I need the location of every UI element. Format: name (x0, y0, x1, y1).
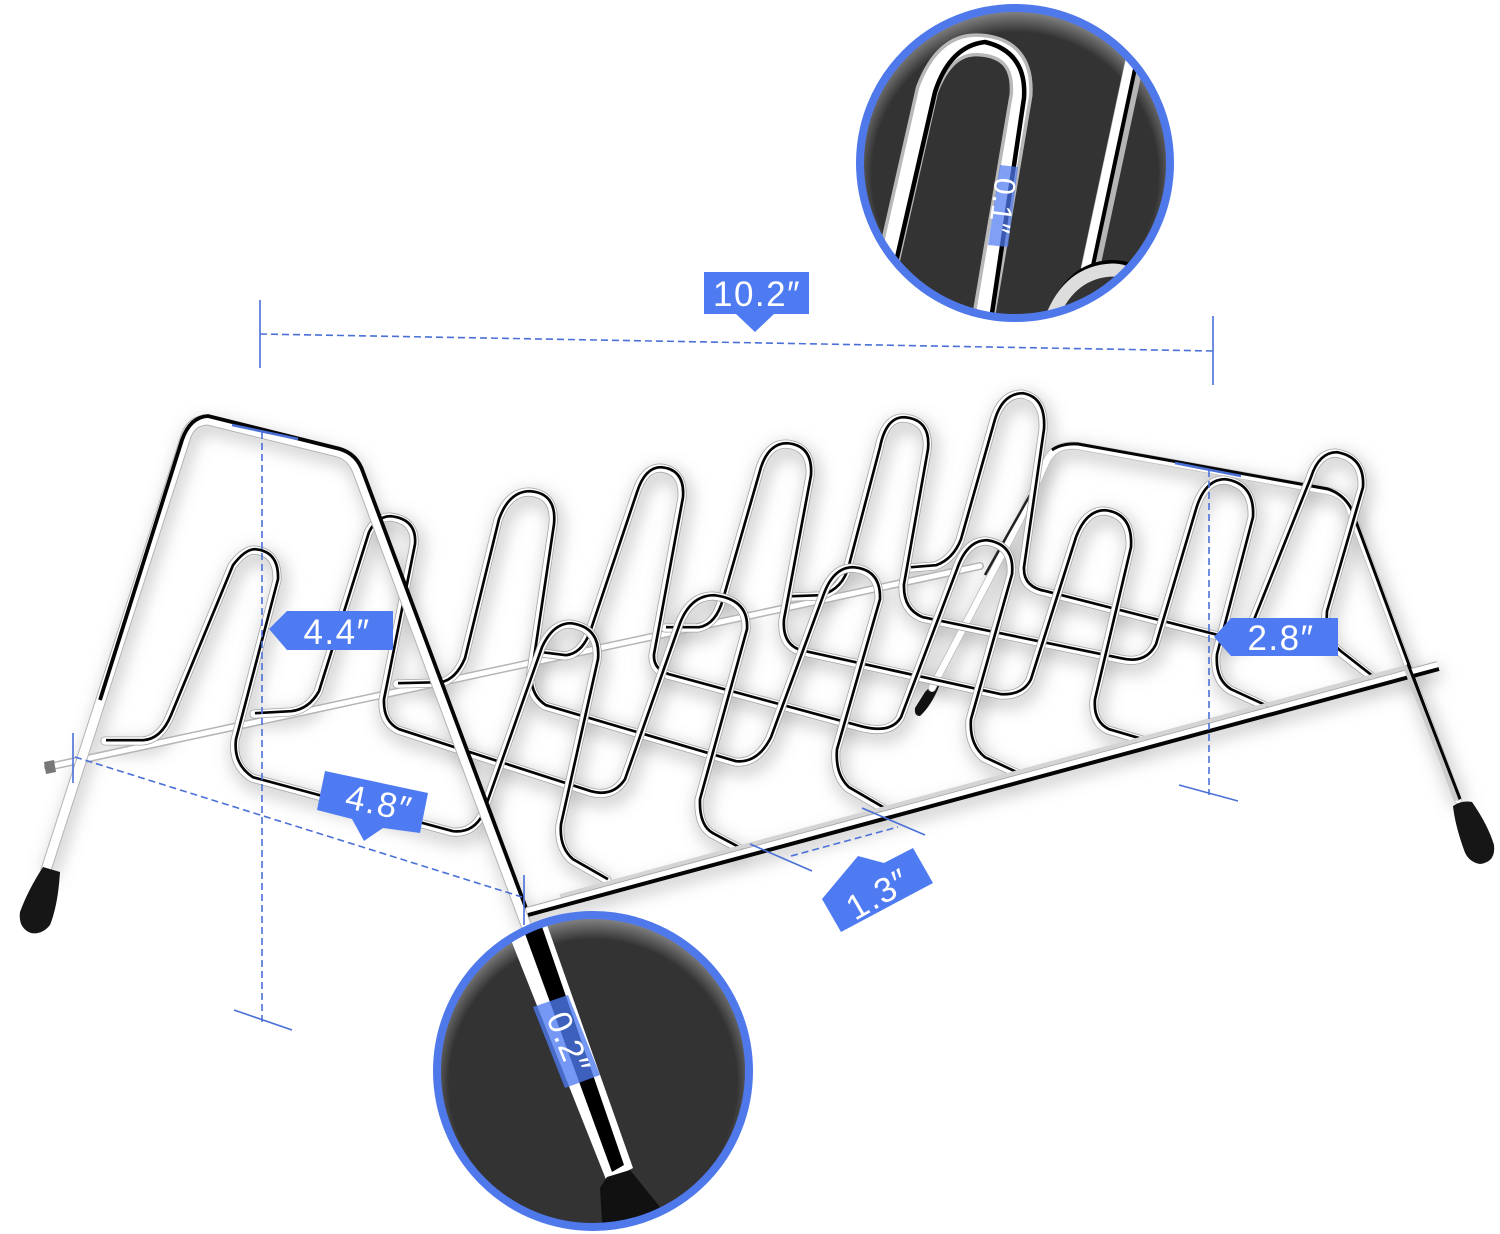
dimension: 4.8 depth line (73, 733, 524, 925)
rib 5 (665, 443, 1143, 740)
rib 6 (791, 417, 1268, 707)
label: 1.3 inches: 1.3″ (839, 861, 917, 928)
label: 2.8 inches (1214, 618, 1338, 658)
label: 2.8 inches: 2.8″ (1247, 619, 1315, 658)
label: 0.1 inch: 0.1″ (982, 176, 1021, 236)
rib 1 (105, 549, 608, 880)
rib 7 (910, 393, 1373, 677)
detail circle: wire thickness 0.2 inch (437, 905, 749, 1234)
right front leg over rail (1406, 664, 1460, 800)
dimension: 10.2 width line (260, 300, 1213, 385)
label: 4.4 inches (269, 611, 393, 652)
magnified rubber foot (600, 1170, 660, 1222)
label: 10.2 inches (704, 272, 809, 332)
label: 4.8 inches: 4.8″ (342, 777, 416, 830)
back rail (44, 566, 980, 774)
rib 2 (254, 516, 747, 850)
wire rack (20, 393, 1494, 933)
dimension: 1.3 spacing line (750, 808, 925, 871)
label: 4.4 inches: 4.4″ (303, 613, 371, 652)
magnified frame wire (512, 926, 633, 1179)
magnified wire loop (888, 42, 1024, 320)
rack rear foot (915, 676, 941, 716)
label: 0.2 inch (533, 995, 600, 1088)
magnified second wire (1086, 50, 1139, 270)
left rubber foot (20, 867, 60, 933)
magnified ring (1048, 260, 1129, 310)
right rubber foot (1453, 802, 1494, 864)
rib 4 (541, 467, 1017, 773)
right end frame (932, 444, 1459, 800)
left end frame (46, 416, 526, 925)
soft shadow under the rack (49, 400, 1461, 931)
dimension: 4.4 height line (232, 425, 298, 1030)
label: 1.3 inches (822, 848, 933, 932)
label: 10.2 inches: 10.2″ (713, 275, 801, 314)
front rail (527, 666, 1439, 915)
rib 3 (397, 491, 885, 809)
dimension: 2.8 height line (1175, 463, 1241, 801)
label: 0.2 inch: 0.2″ (539, 1007, 597, 1079)
label: 4.8 inches (317, 771, 428, 841)
detail circle: wire thickness 0.1 inch (860, 8, 1170, 325)
